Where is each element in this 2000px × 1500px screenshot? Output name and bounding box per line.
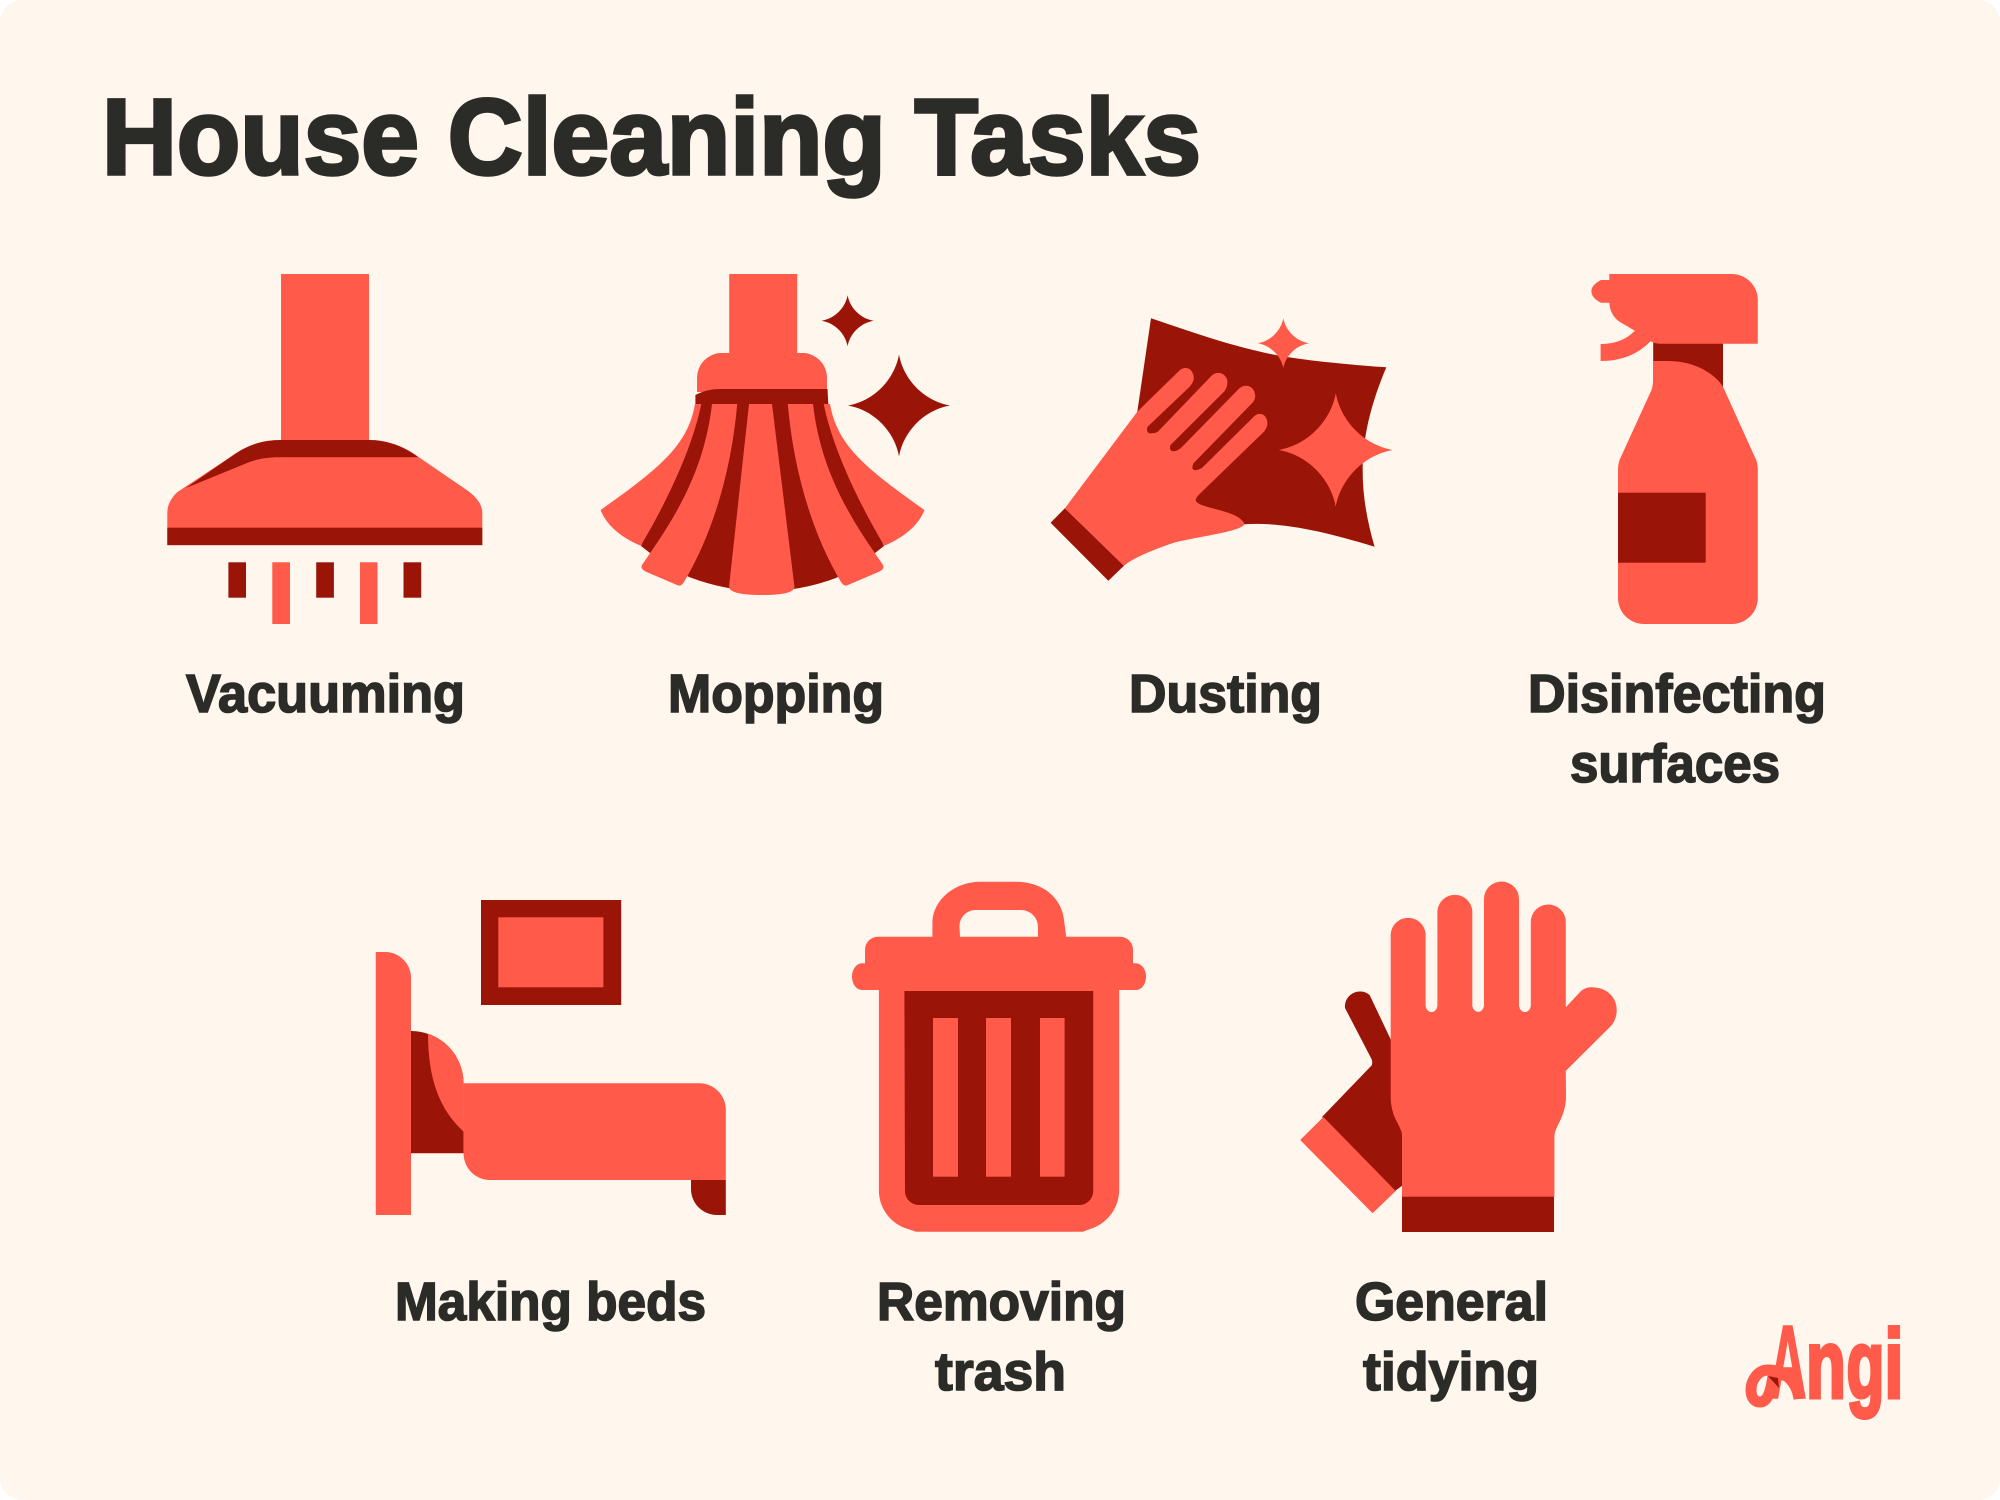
logo: Angi: n <box>1806 1310 1846 1419</box>
label: General tidying: General <box>1355 1272 1548 1332</box>
label: Disinfecting surfaces: surfaces <box>1570 734 1780 794</box>
icon: rubber gloves <box>1300 882 1617 1232</box>
label: General tidying <box>1355 1272 1548 1402</box>
icon: small sparkle <box>822 295 874 346</box>
icon: range hood <box>167 274 482 624</box>
label: Removing trash <box>877 1272 1126 1402</box>
label: Removing trash: trash <box>935 1342 1066 1402</box>
label: Making beds: Making beds <box>395 1272 706 1332</box>
icon: small sparkle <box>1258 318 1309 368</box>
label: Disinfecting surfaces: Disinfecting <box>1528 664 1826 724</box>
label: Disinfecting surfaces <box>1528 664 1826 794</box>
label: Dusting: Dusting <box>1129 664 1322 724</box>
label: Mopping: Mopping <box>668 664 884 724</box>
logo: Angi: A <box>1769 1306 1807 1421</box>
label: General tidying: tidying <box>1363 1342 1539 1402</box>
icon: dusting cloth and hand <box>1051 318 1393 581</box>
icon: bed <box>376 900 726 1215</box>
icon: mop <box>601 274 950 595</box>
icon: large sparkle <box>1279 393 1393 507</box>
icon: large sparkle <box>848 354 950 456</box>
icon: trash can <box>852 882 1146 1232</box>
logo: Angi <box>1751 1306 1904 1421</box>
logo: Angi: i <box>1884 1310 1904 1418</box>
logo: Angi: g <box>1846 1311 1884 1419</box>
icon: spray bottle <box>1591 274 1758 624</box>
label: Vacuuming: Vacuuming <box>186 664 465 724</box>
title: House Cleaning Tasks <box>102 76 1201 197</box>
label: Removing trash: Removing <box>877 1272 1126 1332</box>
